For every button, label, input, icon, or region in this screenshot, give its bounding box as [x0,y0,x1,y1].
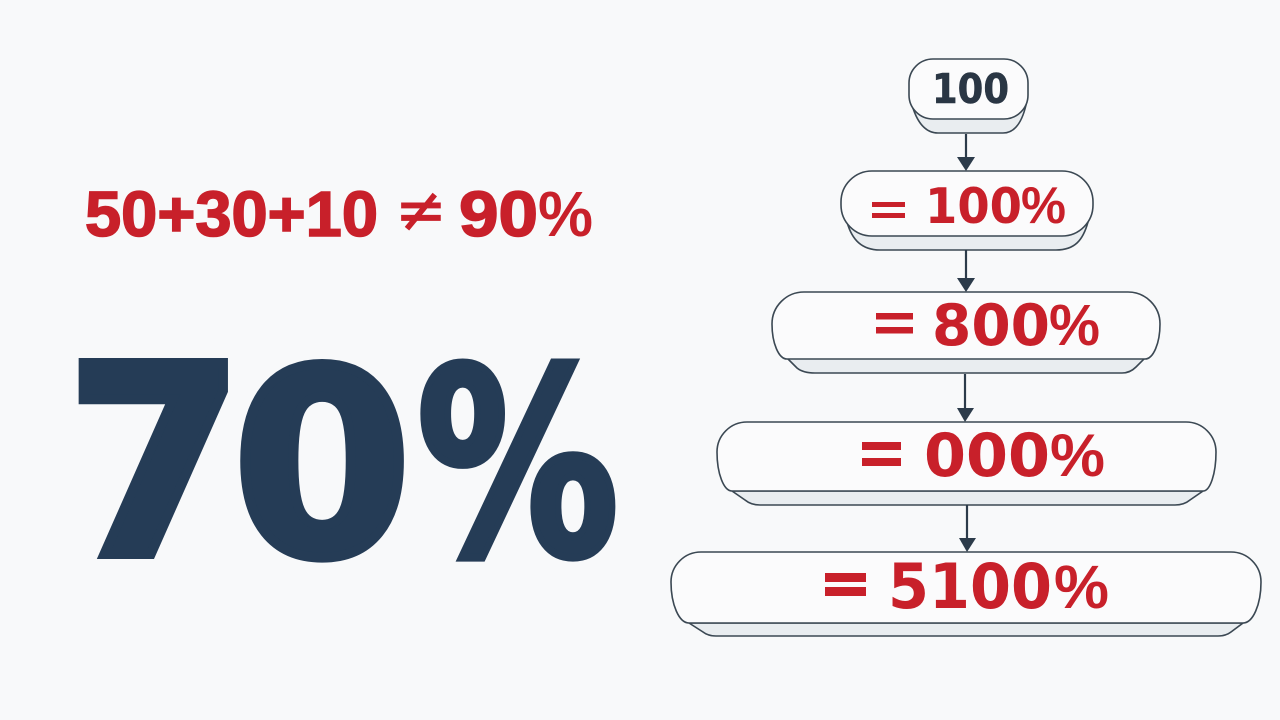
arrow 1 [957,134,975,171]
big percent figure: % [417,314,619,615]
flow box: = 800% [772,292,1160,373]
big percent figure: 0 [233,317,411,615]
flow box: 100 [909,59,1028,133]
flow box: = 000%: 000 [924,421,1050,491]
flow box: = 5100%: % [1054,553,1109,621]
big percent figure: 7 [66,310,243,616]
flow box: = 100%: 100 [925,178,1022,235]
equation heading: 90 [459,178,538,250]
flow box: = 800%: % [1049,293,1100,358]
flow box: = 100% [841,171,1093,250]
flow box: = 800%: 800 [932,293,1050,359]
arrow 2 [957,250,975,292]
equation heading: ≠ [395,173,447,246]
flow box: 100: 100 [932,65,1009,113]
flow box: = 5100% [671,550,1261,636]
big percent figure [66,310,619,616]
flow box: = 5100%: 5100 [888,550,1052,623]
arrow 4 [959,505,976,552]
arrow 3 [957,374,974,422]
flow box: = 100%: % [1021,177,1066,235]
equation heading: % [538,178,593,250]
equation heading: 50+30+10 [85,178,378,250]
flow box: = 000%: % [1050,422,1105,489]
flow box: = 000% [717,421,1216,505]
equation heading [85,173,593,250]
